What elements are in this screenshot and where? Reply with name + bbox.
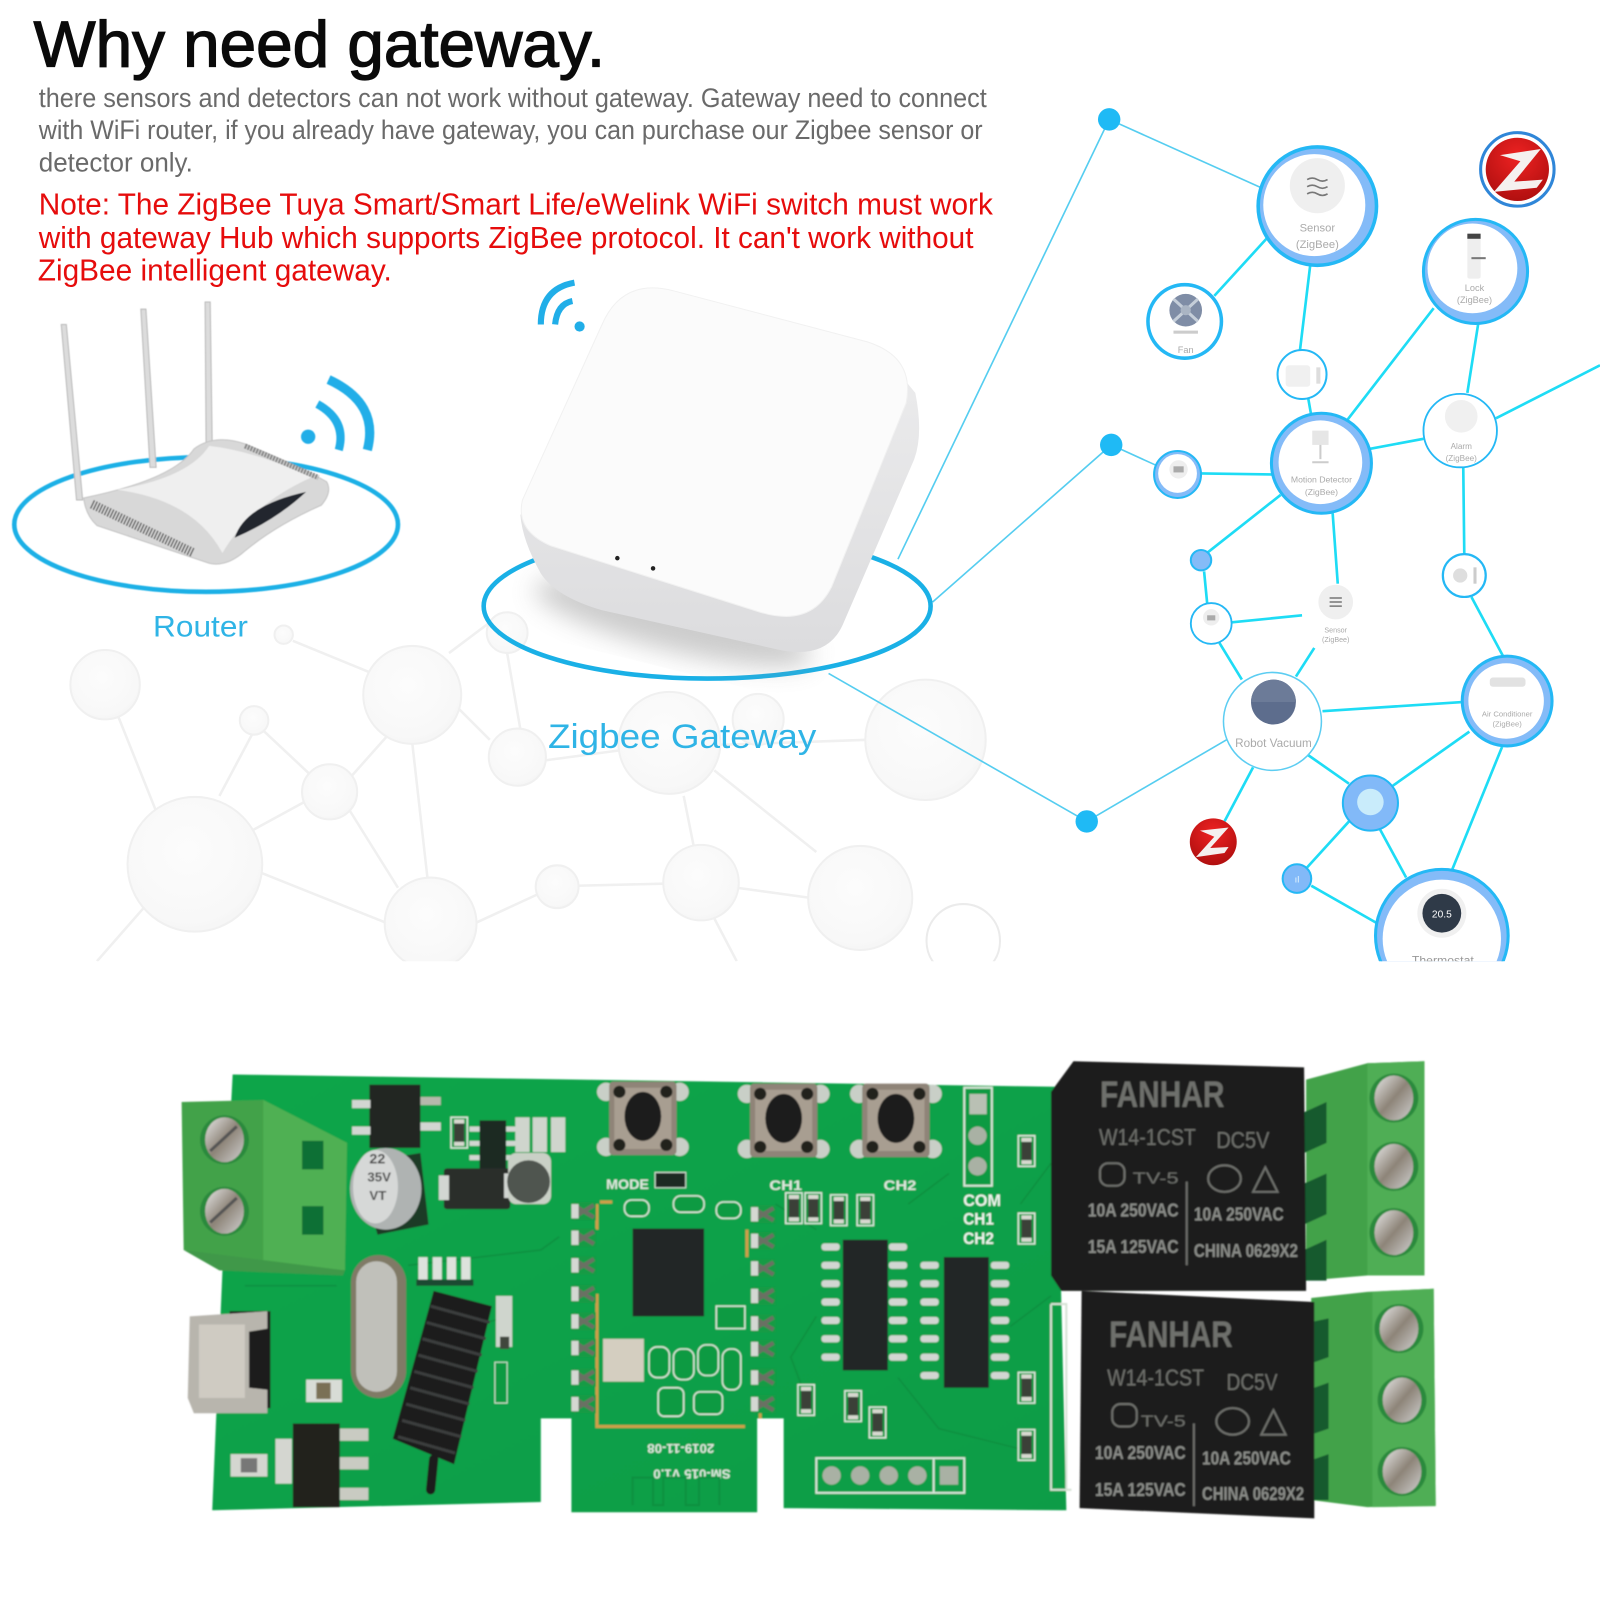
node: ZigBee logo lower bbox=[1190, 818, 1237, 865]
router LED panel bbox=[235, 492, 306, 538]
text block: gateway explanation: detector only. bbox=[39, 147, 193, 177]
module gold outline bbox=[597, 1202, 760, 1427]
module antenna tab text: SM-015 V1.0 bbox=[653, 1466, 731, 1481]
node: connector dots bbox=[1076, 108, 1211, 833]
relay bottom: 15A 125VAC bbox=[1095, 1479, 1186, 1500]
relay bottom bbox=[1080, 1291, 1314, 1518]
node: Thermostat bbox=[1374, 868, 1510, 962]
capacitor 22uF 35V: VT bbox=[369, 1188, 386, 1203]
node: Fan: Fan bbox=[1178, 345, 1194, 355]
gateway base ellipse bbox=[484, 534, 931, 679]
node: door sensor bbox=[1278, 350, 1327, 399]
router body bbox=[84, 440, 329, 564]
gateway indicator holes bbox=[615, 556, 655, 571]
passive components CH row bbox=[786, 1136, 1035, 1460]
module right pads bbox=[751, 1205, 776, 1413]
text block: red note bbox=[38, 187, 994, 288]
silver crystal bbox=[351, 1255, 406, 1398]
LED D5 bbox=[655, 1172, 686, 1188]
node: Thermostat: Thermostat bbox=[1412, 953, 1474, 967]
IC U4 bbox=[821, 1240, 907, 1370]
left terminal block bbox=[182, 1100, 347, 1276]
node: Air Conditioner (ZigBee): (ZigBee) bbox=[1492, 720, 1522, 729]
silkscreen labels bbox=[606, 1177, 1001, 1248]
node: Robot Vacuum: Robot Vacuum bbox=[1235, 737, 1312, 750]
node: Fan bbox=[1148, 285, 1221, 358]
relay bottom: DC5V bbox=[1227, 1369, 1278, 1395]
node: ZigBee logo top right bbox=[1481, 133, 1554, 206]
node: central blue hub bbox=[1343, 776, 1398, 831]
silkscreen labels: CH2 bbox=[963, 1230, 994, 1248]
capacitor 22uF 35V: 35V bbox=[367, 1170, 391, 1185]
gateway shadow bbox=[528, 560, 819, 685]
IC U3 bbox=[920, 1257, 1009, 1388]
node: plain Sensor (ZigBee) bbox=[1318, 585, 1353, 644]
node: plain Sensor (ZigBee): Sensor bbox=[1324, 627, 1348, 635]
silkscreen labels: CH1 bbox=[963, 1210, 994, 1228]
capacitor 22uF 35V: 22 bbox=[369, 1151, 385, 1167]
relay bottom: W14-1CST bbox=[1107, 1365, 1204, 1391]
node: Sensor (ZigBee) bbox=[1258, 147, 1377, 265]
node: Robot Vacuum bbox=[1223, 672, 1321, 770]
router top highlight bbox=[117, 446, 311, 553]
node: Sensor (ZigBee): (ZigBee) bbox=[1296, 239, 1339, 251]
chip U2 and passives bbox=[451, 1117, 565, 1171]
capacitor pads C10 C13 bbox=[495, 1296, 512, 1403]
relay bottom: CHINA 0629X2 bbox=[1202, 1483, 1304, 1504]
silkscreen labels: MODE bbox=[606, 1177, 649, 1193]
module MCU chip bbox=[633, 1229, 704, 1316]
diode and inductor bbox=[439, 1153, 551, 1209]
router label: Router bbox=[153, 611, 248, 644]
tactile buttons bbox=[597, 1082, 942, 1158]
title: Why need gateway. bbox=[34, 7, 605, 80]
node: Lock (ZigBee): (ZigBee) bbox=[1457, 295, 1492, 305]
micro USB connector bbox=[188, 1311, 270, 1413]
relay bottom: FANHAR bbox=[1109, 1314, 1233, 1355]
node: Thermostat: 20.5 bbox=[1432, 909, 1452, 920]
module antenna tab text bbox=[647, 1441, 731, 1481]
relay top bbox=[1051, 1061, 1306, 1291]
text block: gateway explanation bbox=[38, 83, 987, 177]
background network pattern bbox=[70, 612, 1000, 978]
relay top: 10A 250VAC bbox=[1194, 1203, 1284, 1224]
text block: gateway explanation: there sensors and detectors can not work without gateway. Gateway need to connect bbox=[39, 83, 987, 113]
mesh links between devices bbox=[1201, 238, 1600, 923]
pcb board bbox=[212, 1074, 1066, 1512]
node: Alarm (ZigBee) bbox=[1423, 394, 1497, 467]
node: small sensor lower left bbox=[1191, 603, 1232, 644]
gateway wifi icon bbox=[541, 283, 585, 332]
node: Motion Detector (ZigBee): (ZigBee) bbox=[1305, 487, 1338, 497]
header J4 bbox=[816, 1458, 964, 1493]
module small passives bbox=[624, 1196, 745, 1416]
capacitor 22uF 35V bbox=[350, 1148, 429, 1235]
module antenna tab text: 2019-11-08 bbox=[647, 1441, 714, 1456]
relay top: CHINA 0629X2 bbox=[1194, 1240, 1298, 1261]
right terminal block top bbox=[1304, 1061, 1424, 1281]
node: Motion Detector (ZigBee) bbox=[1271, 413, 1371, 513]
gateway top face bbox=[521, 288, 908, 616]
connection lines: gateway to network bbox=[829, 119, 1261, 821]
module crystal bbox=[603, 1339, 644, 1382]
PCB photo bbox=[182, 1061, 1436, 1518]
node: small blue device bbox=[1283, 864, 1311, 893]
wireless module bbox=[571, 1196, 776, 1427]
silkscreen labels: COM bbox=[963, 1192, 1001, 1210]
node: Lock (ZigBee) bbox=[1423, 219, 1528, 323]
relay top: DC5V bbox=[1216, 1127, 1270, 1153]
text block: red note: with gateway Hub which supports ZigBee protocol. It can't work without bbox=[38, 221, 974, 255]
node: Alarm (ZigBee): Alarm bbox=[1451, 442, 1472, 451]
node: small blue device: ıl bbox=[1295, 875, 1299, 885]
pcb traces bbox=[245, 1163, 1051, 1449]
silkscreen labels: CH1 bbox=[769, 1178, 802, 1194]
text block: gateway explanation: with WiFi router, if you already have gateway, you can purchase our Zigbee sensor or bbox=[38, 115, 983, 145]
spring antenna bbox=[393, 1291, 492, 1490]
node: small sensor left bbox=[1154, 451, 1201, 498]
router side vents bbox=[92, 504, 194, 553]
silkscreen labels: CH2 bbox=[884, 1178, 916, 1194]
relay bottom: 10A 250VAC bbox=[1202, 1447, 1291, 1468]
relay bottom: TV-5 bbox=[1141, 1414, 1186, 1431]
node: Air Conditioner (ZigBee): Air Conditioner bbox=[1482, 709, 1533, 718]
relay top: 10A 250VAC bbox=[1088, 1199, 1179, 1220]
node: plain Sensor (ZigBee): (ZigBee) bbox=[1322, 636, 1349, 644]
router group bbox=[14, 302, 398, 592]
regulator U1 bbox=[231, 1423, 368, 1507]
relay top: TV-5 bbox=[1133, 1171, 1179, 1188]
router antennas bbox=[61, 302, 212, 500]
router wifi icon bbox=[301, 380, 370, 450]
gateway group bbox=[484, 283, 931, 685]
header J7 bbox=[964, 1088, 992, 1186]
node: small device right bbox=[1443, 554, 1486, 597]
relay silk outline lower bbox=[1051, 1304, 1071, 1490]
node: Alarm (ZigBee): (ZigBee) bbox=[1446, 454, 1477, 463]
module PCB antenna traces bbox=[633, 1478, 719, 1505]
right terminal block bottom bbox=[1311, 1289, 1436, 1507]
component U5 pads bbox=[416, 1257, 473, 1286]
node: Air Conditioner (ZigBee) bbox=[1462, 656, 1552, 746]
relay bottom: 10A 250VAC bbox=[1095, 1442, 1186, 1463]
router base ellipse bbox=[14, 457, 398, 592]
transistor Q1 bbox=[352, 1085, 441, 1148]
capacitor C7 bbox=[306, 1380, 342, 1402]
relay top: FANHAR bbox=[1100, 1074, 1224, 1115]
relay top: W14-1CST bbox=[1099, 1124, 1196, 1150]
relay top: 15A 125VAC bbox=[1088, 1236, 1179, 1257]
text block: red note: Note: The ZigBee Tuya Smart/Smart Life/eWelink WiFi switch must work bbox=[39, 187, 994, 221]
gateway label: Zigbee Gateway bbox=[548, 718, 817, 756]
node: Motion Detector (ZigBee): Motion Detector bbox=[1291, 475, 1352, 485]
text block: red note: ZigBee intelligent gateway. bbox=[38, 254, 392, 288]
router top vent bbox=[245, 446, 318, 478]
node: Sensor (ZigBee): Sensor bbox=[1300, 223, 1335, 235]
gateway body bbox=[520, 316, 919, 652]
module left pads bbox=[571, 1202, 596, 1413]
node: Lock (ZigBee): Lock bbox=[1465, 283, 1485, 293]
